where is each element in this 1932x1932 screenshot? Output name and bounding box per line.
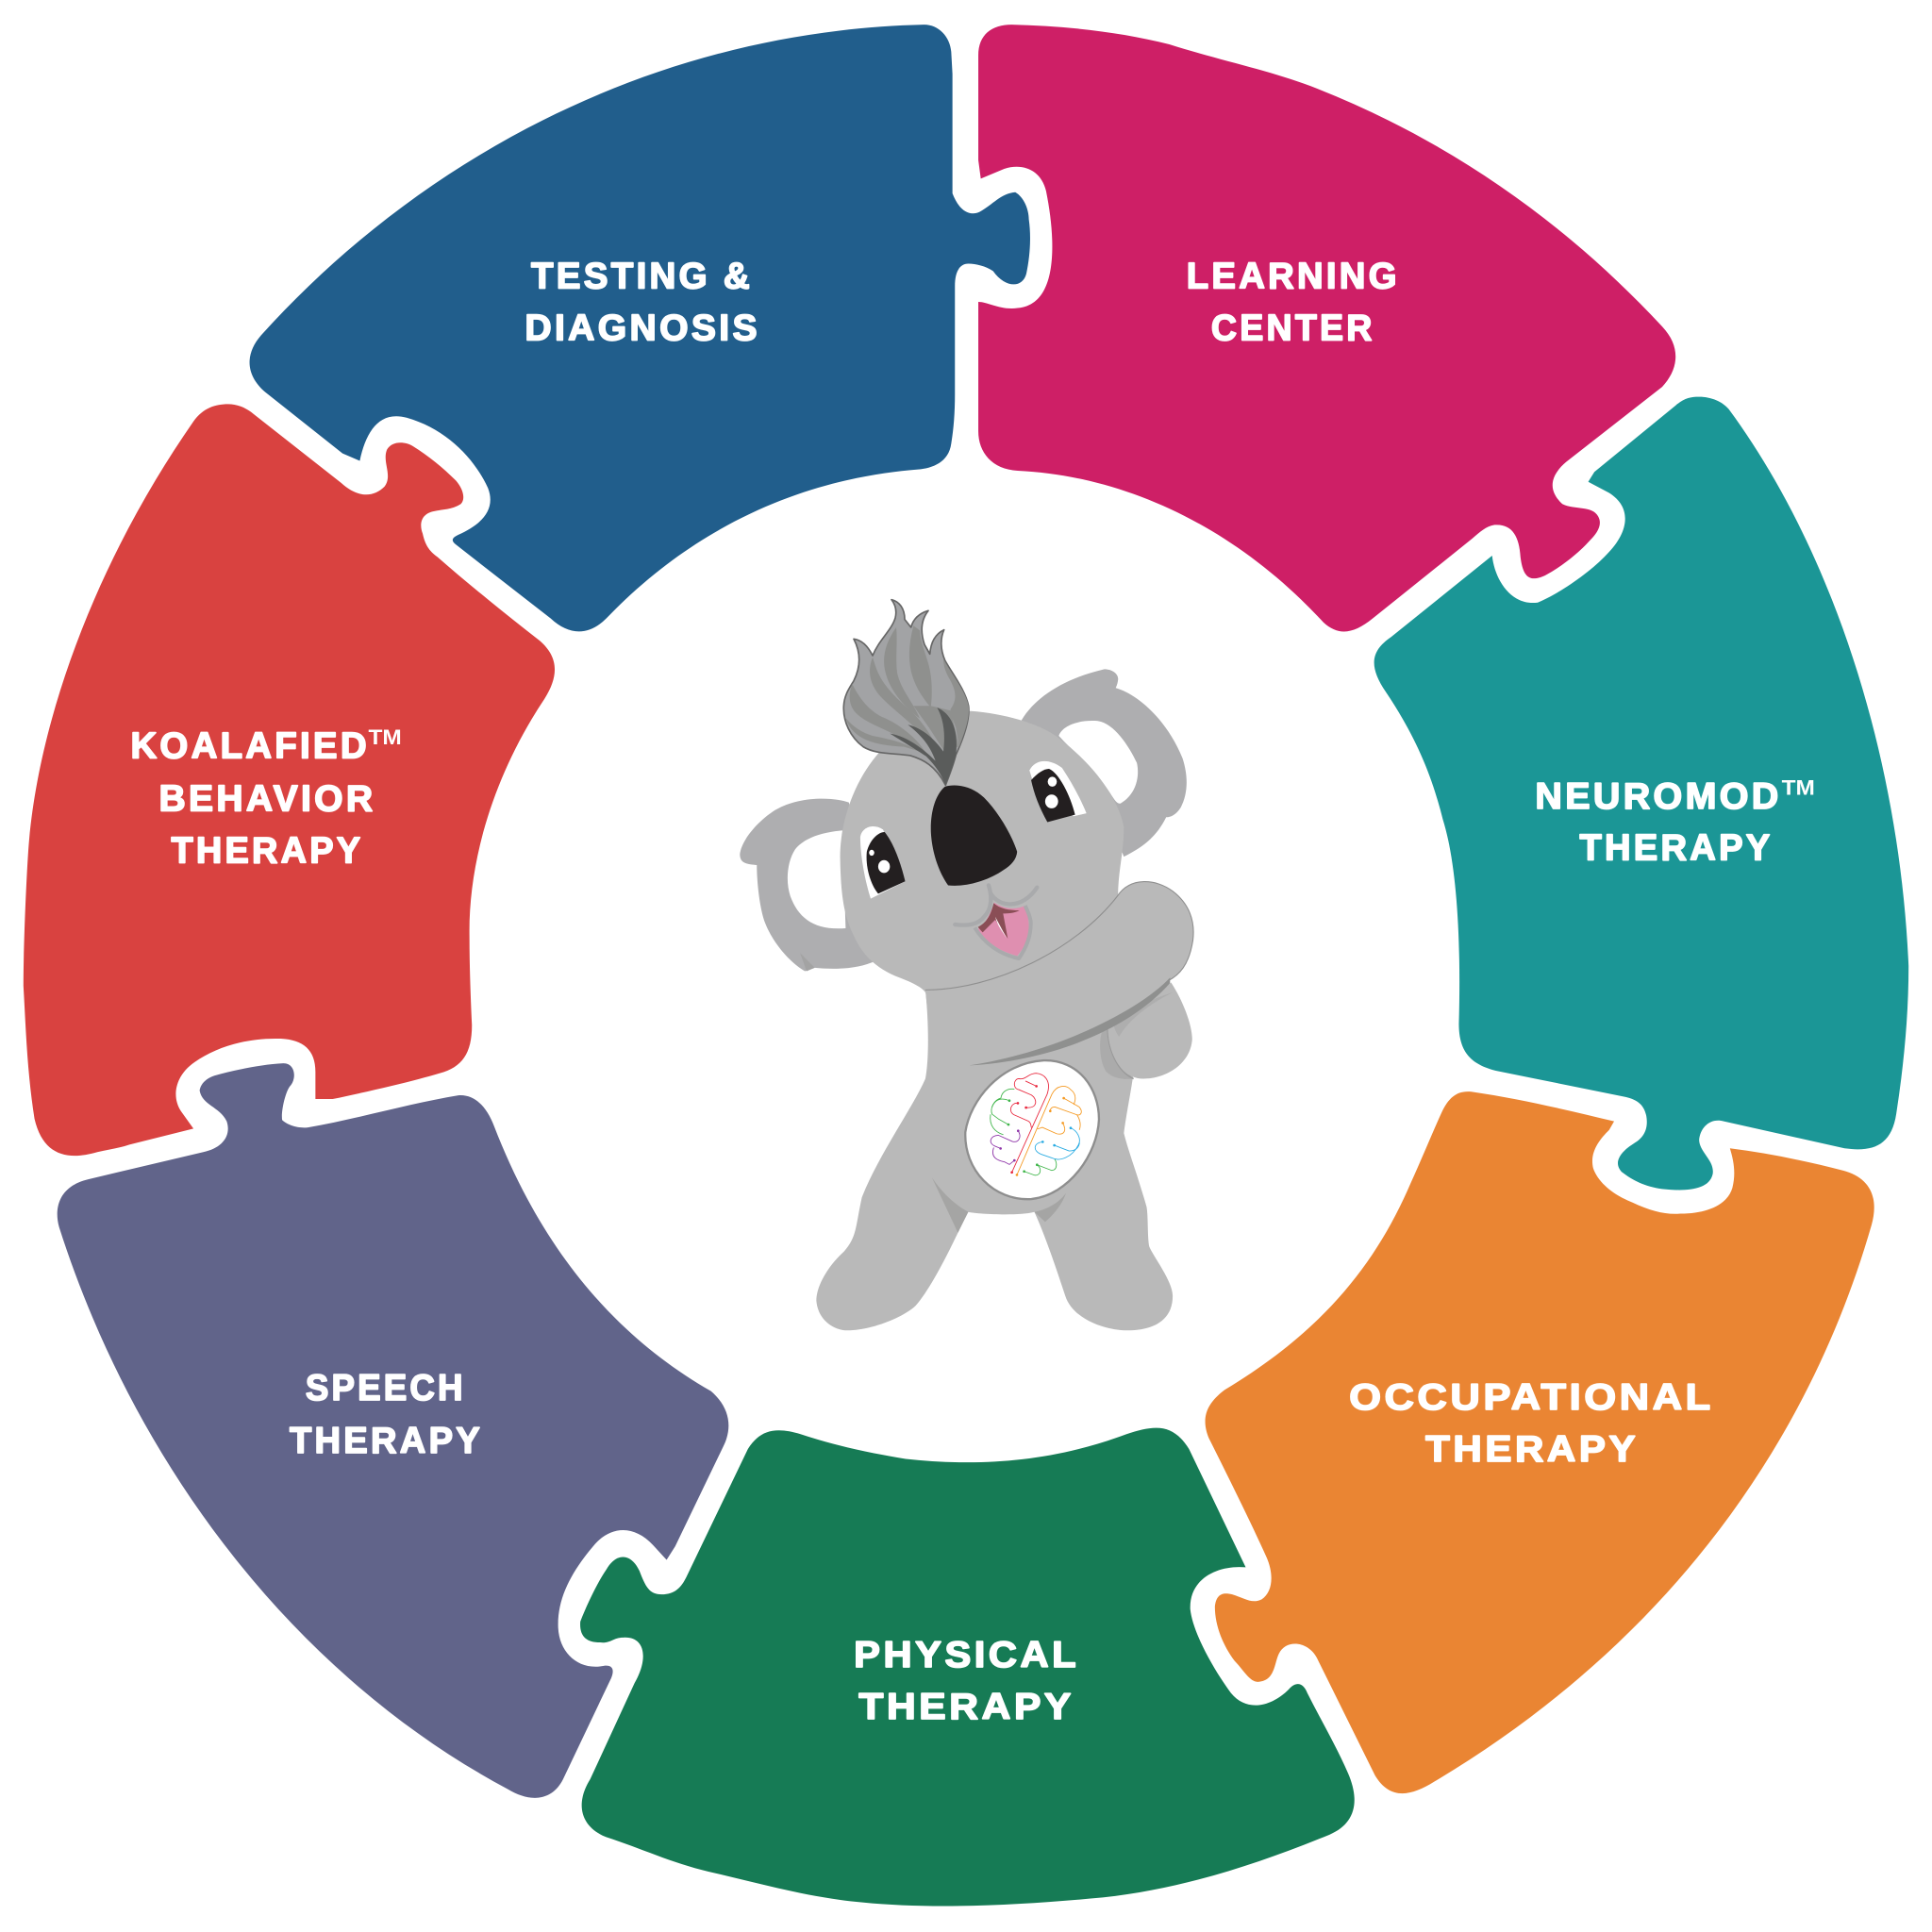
heading: physical therapy (854, 1635, 1079, 1727)
koala lower arm (1100, 983, 1192, 1079)
heading: neuromod therapy: THERAPY (1579, 828, 1774, 869)
heading: koalafied behavior therapy (130, 725, 402, 871)
koala body and legs (816, 970, 1173, 1330)
heading: physical therapy: PHYSICAL (854, 1635, 1079, 1675)
koala nose (931, 785, 1017, 886)
brain: green lobe (991, 1089, 1057, 1175)
koala raised arm (925, 882, 1193, 1069)
panel: occupational therapy (1206, 1091, 1874, 1793)
koala leg shadows (932, 1177, 1066, 1233)
koala head (841, 711, 1124, 992)
heading: learning center: CENTER (1211, 308, 1375, 348)
koala hair tuft (843, 600, 969, 785)
heading: koalafied behavior therapy: TM (369, 725, 402, 749)
panel: physical therapy (580, 1428, 1355, 1907)
koala left ear (740, 799, 876, 971)
heading: occupational therapy: OCCUPATIONAL (1349, 1377, 1714, 1418)
heading: speech therapy: SPEECH (306, 1368, 466, 1408)
heading: neuromod therapy: TM (1782, 775, 1815, 799)
panel: neuromod therapy (1374, 397, 1908, 1190)
koala mouth (955, 885, 1037, 958)
heading: neuromod therapy (1535, 775, 1815, 869)
heading: speech therapy: THERAPY (290, 1421, 483, 1461)
icon: belly brain badge (965, 1060, 1099, 1199)
koala right eye (1029, 761, 1087, 823)
heading: testing and diagnosis (525, 257, 760, 348)
heading: koalafied behavior therapy: BEHAVIOR (158, 778, 375, 819)
heading: occupational therapy: THERAPY (1425, 1429, 1639, 1470)
heading: testing and diagnosis: DIAGNOSIS (525, 308, 760, 348)
panel: koalafied behavior therapy (24, 404, 555, 1156)
heading: learning center (1187, 257, 1400, 348)
koala right ear (1020, 669, 1187, 857)
heading: koalafied behavior therapy: KOALAFIED (130, 725, 370, 766)
heading: occupational therapy (1349, 1377, 1714, 1470)
koala left eye (860, 826, 906, 899)
heading: neuromod therapy: NEUROMOD (1535, 776, 1782, 817)
koala mascot (740, 600, 1193, 1330)
panel: testing and diagnosis (250, 25, 1030, 631)
heading: learning center: LEARNING (1187, 257, 1400, 297)
heading: koalafied behavior therapy: THERAPY (172, 830, 363, 871)
brain: orange lobe (1016, 1087, 1081, 1176)
heading: speech therapy (290, 1368, 483, 1461)
brain: purple lobe (991, 1129, 1020, 1164)
heading: testing and diagnosis: TESTING & (531, 257, 753, 297)
heading: physical therapy: THERAPY (858, 1687, 1074, 1727)
brain: blue lobe (1035, 1126, 1079, 1159)
koala body, ears, arms and eyes (740, 669, 1193, 1330)
panel: learning center (978, 25, 1675, 631)
panel: speech therapy (58, 1063, 728, 1798)
brain: red lobe (1010, 1074, 1048, 1174)
